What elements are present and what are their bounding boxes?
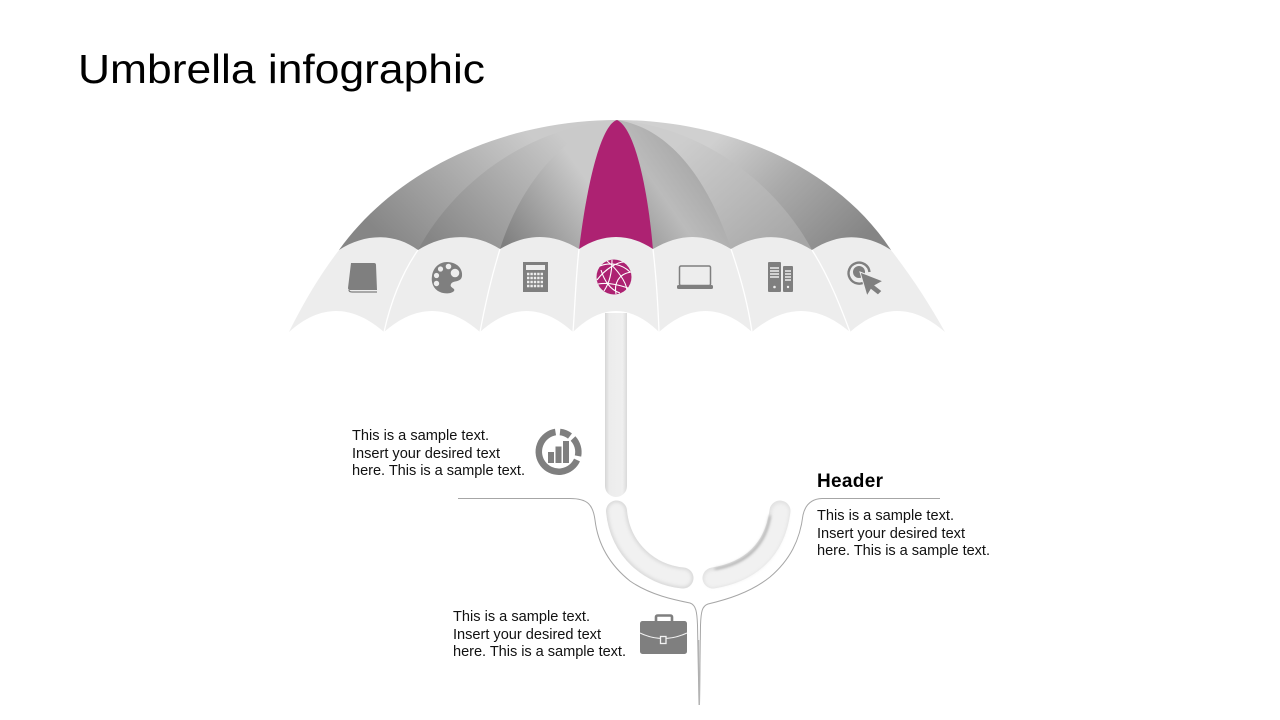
connector lines bbox=[458, 498, 940, 705]
title: Umbrella infographic bbox=[78, 46, 485, 92]
umbrella handle bbox=[605, 313, 780, 579]
icon: briefcase bbox=[640, 616, 687, 654]
body text: Insert your desired text bbox=[817, 526, 965, 542]
lower panel 3 bbox=[480, 237, 579, 332]
lower panel 7 bbox=[812, 237, 945, 332]
highlighted canopy panel bbox=[579, 120, 653, 250]
handle left curve bbox=[616, 511, 683, 578]
lower panel 2 bbox=[384, 237, 500, 332]
umbrella lower panels bbox=[289, 237, 945, 332]
body text bbox=[817, 508, 990, 559]
icon: laptop bbox=[677, 266, 713, 289]
icon: server towers bbox=[768, 262, 793, 292]
text block: bottom: This is a sample text. bbox=[453, 609, 590, 625]
text block: top left bbox=[352, 428, 525, 479]
icon: palette bbox=[432, 262, 462, 293]
icon: calculator bbox=[523, 262, 548, 292]
text block: right with header bbox=[817, 471, 990, 559]
canopy panel 6 bbox=[617, 120, 812, 252]
lower panel 5 bbox=[653, 237, 752, 332]
text block: top left: This is a sample text. bbox=[352, 428, 489, 444]
body text: here. This is a sample text. bbox=[817, 543, 990, 559]
header: Header bbox=[817, 471, 884, 492]
canopy panel 3 bbox=[500, 120, 617, 252]
canopy panel 2 bbox=[418, 120, 617, 252]
text block: top left: Insert your desired text bbox=[352, 446, 500, 462]
canopy panel 1 bbox=[339, 120, 617, 252]
icon: cursor target bbox=[849, 263, 883, 296]
canopy panel 5 bbox=[617, 120, 731, 252]
lower panel 4 bbox=[573, 237, 659, 332]
text block: bottom: here. This is a sample text. bbox=[453, 644, 626, 660]
umbrella canopy bbox=[339, 120, 891, 252]
canopy panel 7 bbox=[617, 120, 891, 252]
lower panel 6 bbox=[731, 237, 850, 332]
handle shaft bbox=[605, 313, 627, 497]
handle right curve bbox=[713, 511, 780, 579]
icon: donut chart bbox=[539, 432, 578, 472]
icon: book bbox=[348, 263, 377, 292]
lower panel 1 bbox=[289, 237, 418, 332]
body text: This is a sample text. bbox=[817, 508, 954, 524]
text block: top left: here. This is a sample text. bbox=[352, 463, 525, 479]
icon: globe bbox=[596, 260, 632, 294]
text block: bottom: Insert your desired text bbox=[453, 627, 601, 643]
text block: bottom bbox=[453, 609, 626, 660]
